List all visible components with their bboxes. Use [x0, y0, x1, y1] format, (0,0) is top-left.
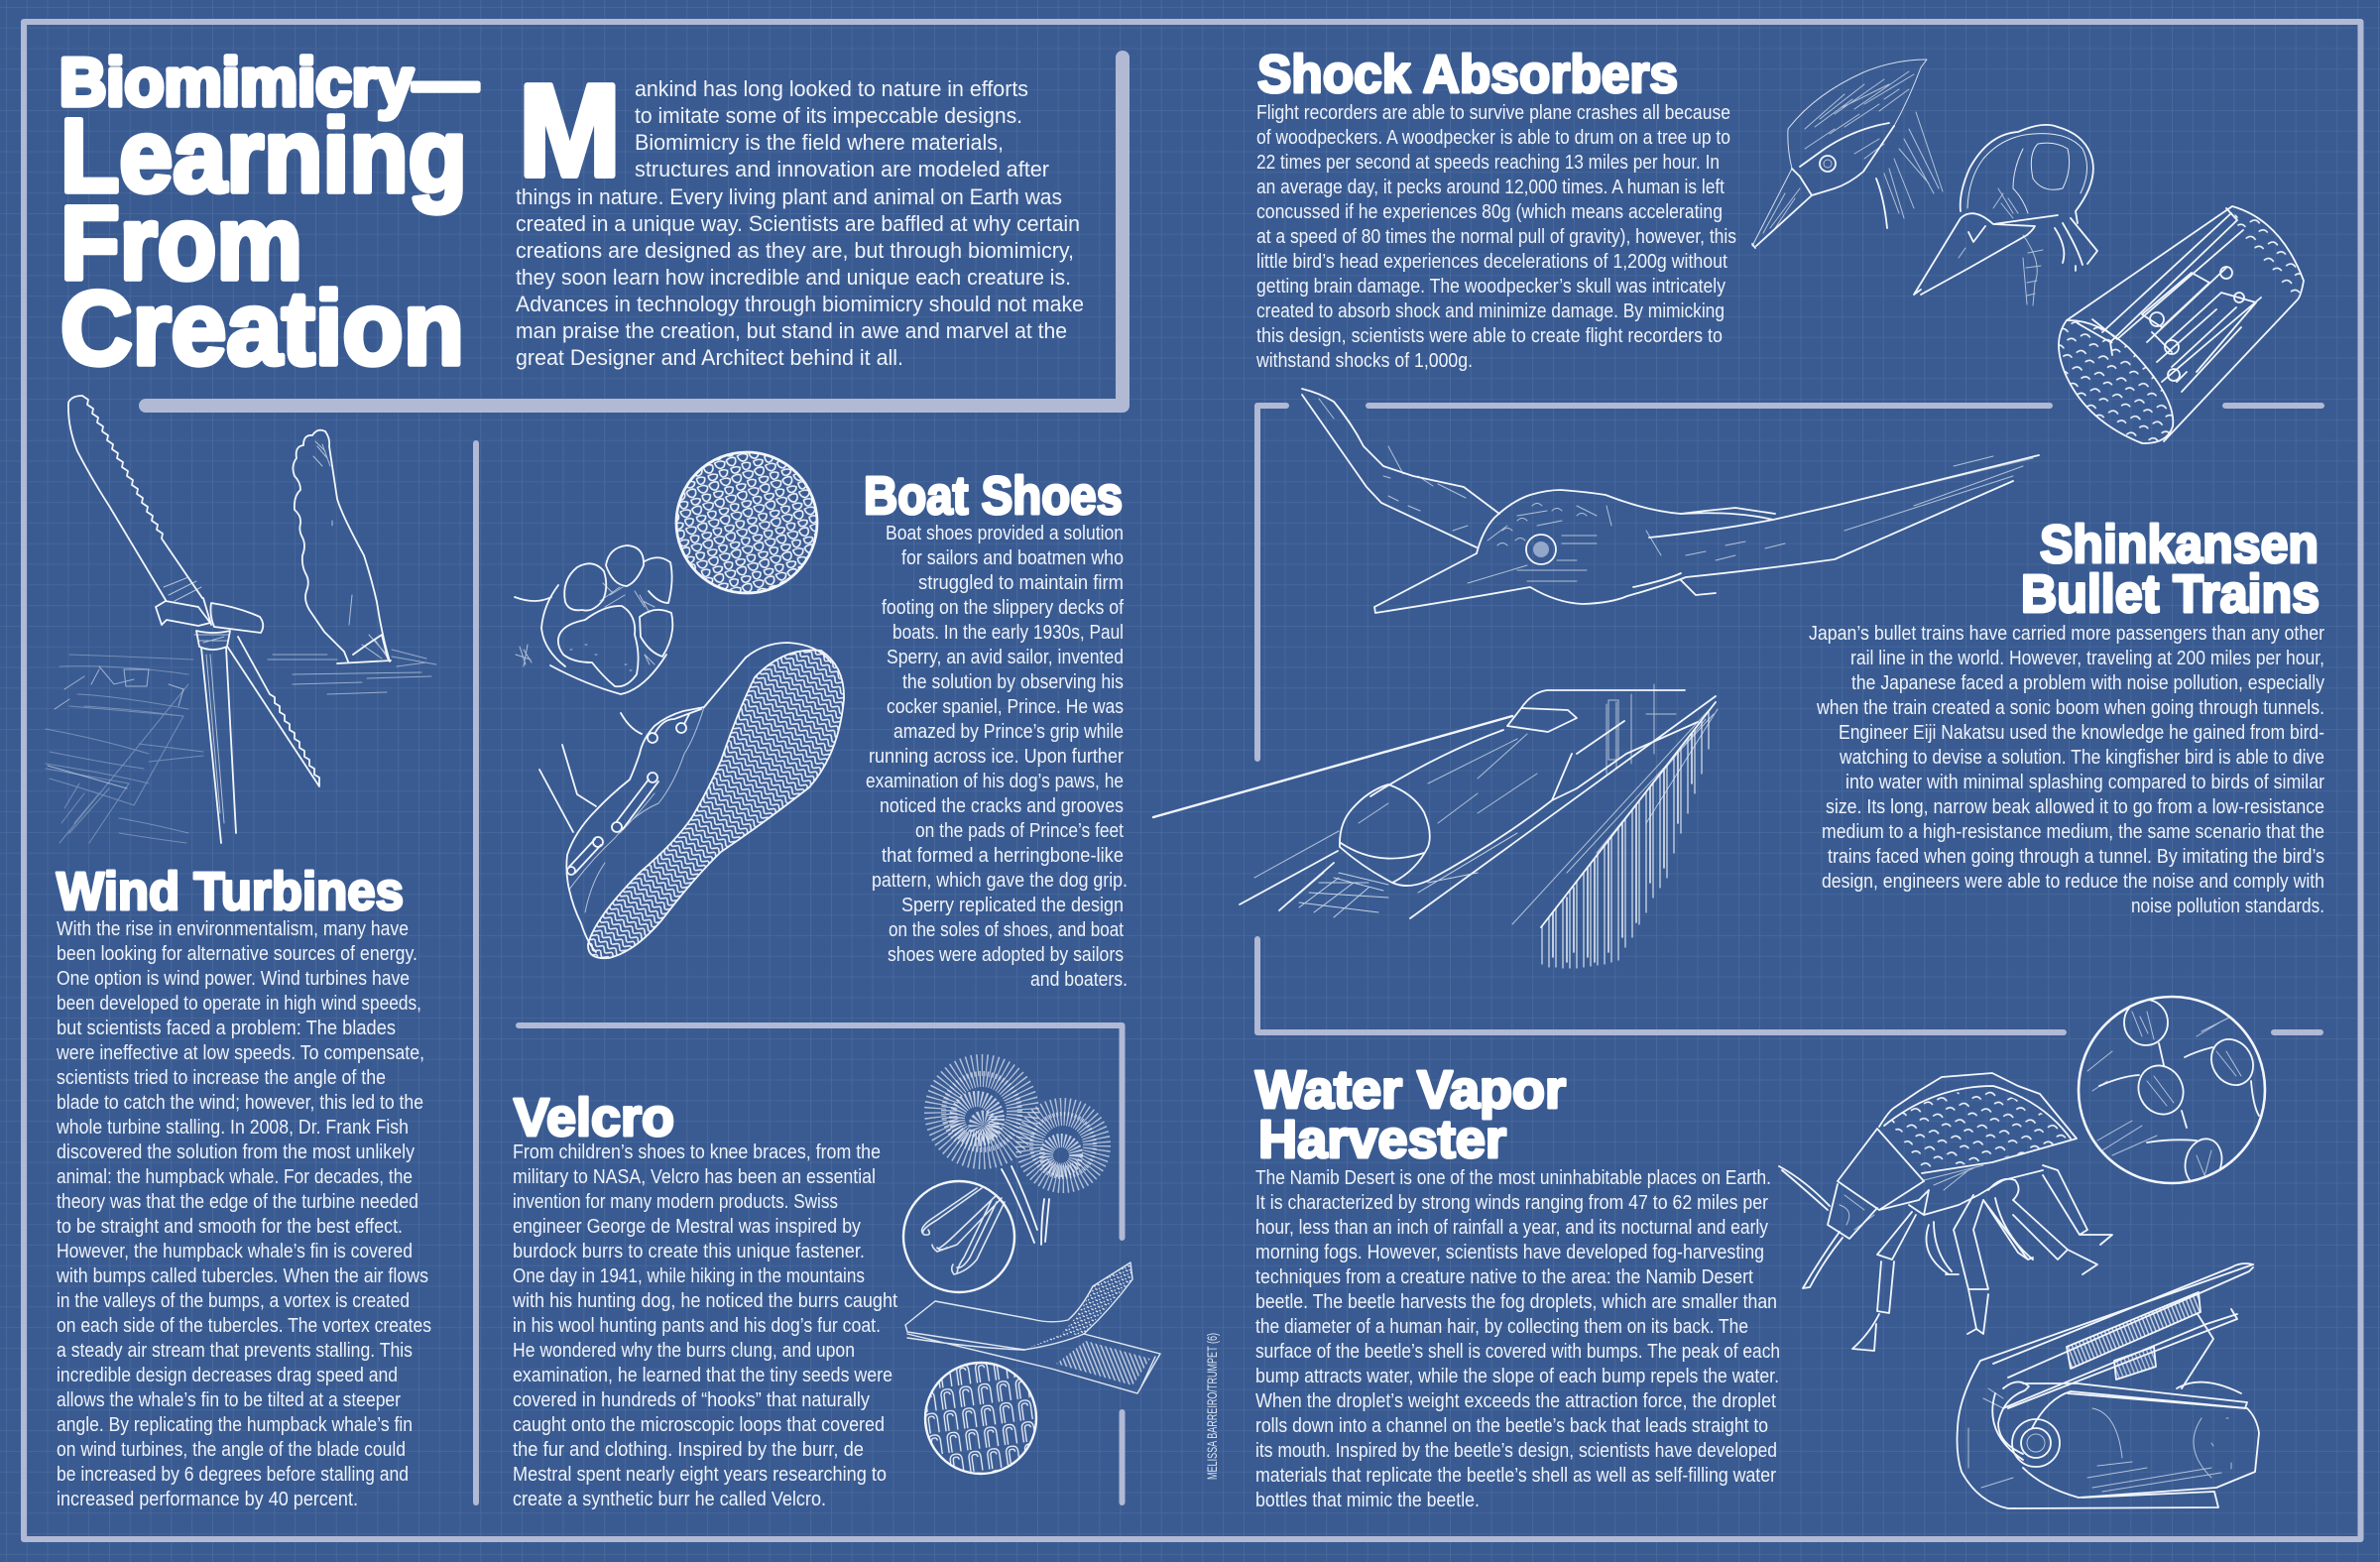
text block: water vapor harvester: It is characterized by strong winds ranging from 47 to 62 miles per: [1255, 1192, 1768, 1214]
intro text block: creations are designed as they are, but through biomimicry,: [516, 238, 1074, 263]
title: From: [60, 185, 302, 301]
photo credit: MELISSA BARREIRO/TRUMPET (6): [1205, 1333, 1220, 1480]
text block: shock absorbers: withstand shocks of 1,000g.: [1255, 350, 1473, 372]
text block: wind turbines: on each side of the tubercles. The vortex creates: [57, 1315, 431, 1337]
text block: wind turbines: been looking for alternative sources of energy.: [57, 943, 417, 965]
text block: velcro: examination, he learned that the tiny seeds were: [513, 1365, 892, 1386]
title: Learning: [60, 98, 467, 214]
text block: wind turbines: on wind turbines, the angle of the blade could: [57, 1439, 406, 1461]
text block: wind turbines: be increased by 6 degrees before stalling and: [57, 1464, 409, 1486]
heading: water vapor harvester: Harvester: [1258, 1110, 1506, 1169]
text block: velcro: create a synthetic burr he called Velcro.: [513, 1489, 826, 1510]
text block: boat shoes: boats. In the early 1930s, Paul: [892, 622, 1124, 644]
intro text block: created in a unique way. Scientists are baffled at why certain: [516, 211, 1080, 236]
title: Biomimicry—: [60, 45, 478, 120]
text block: wind turbines: theory was that the edge of the turbine needed: [57, 1191, 418, 1213]
heading: shinkansen bullet trains: [2021, 515, 2320, 624]
heading: velcro: Velcro: [514, 1088, 674, 1147]
title: [60, 45, 478, 387]
heading: wind turbines: Wind Turbines: [57, 862, 404, 921]
text block: water vapor harvester: When the droplet’s weight exceeds the attraction force, the droplet: [1255, 1390, 1776, 1412]
text block: shock absorbers: getting brain damage. The woodpecker’s skull was intricately: [1256, 276, 1726, 298]
text block: velcro: the fur and clothing. Inspired by the burr, de: [513, 1439, 864, 1461]
text block: shock absorbers: at a speed of 80 times the normal pull of gravity), however, this: [1256, 226, 1736, 248]
icon: beetle bump magnified circle: [2079, 997, 2265, 1190]
text block: velcro: caught onto the microscopic loops that covered: [513, 1414, 885, 1436]
text block: wind turbines: blade to catch the wind; however, this led to the: [57, 1092, 423, 1114]
text block: shinkansen: Engineer Eiji Nakatsu used the knowledge he gained from bird-: [1839, 722, 2324, 744]
text block: wind turbines: increased performance by 40 percent.: [57, 1489, 358, 1510]
heading: shinkansen bullet trains: Shinkansen: [2040, 515, 2319, 574]
icon: shinkansen bullet train: [1153, 684, 1718, 968]
velcro bracket rule: [519, 1025, 1123, 1502]
text block: water vapor harvester: [1255, 1167, 1780, 1511]
intro text block: they soon learn how incredible and unique each creature is.: [516, 265, 1071, 290]
text block: boat shoes: running across ice. Upon further: [869, 746, 1124, 768]
text block: velcro: burdock burrs to create this unique fastener.: [513, 1241, 865, 1262]
icon: paw pad texture circle: [676, 452, 817, 593]
text block: wind turbines: were ineffective at low speeds. To compensate,: [56, 1042, 424, 1064]
icon: self-filling water bottle: [1958, 1263, 2259, 1508]
icon: namib beetle: [1779, 1073, 2112, 1351]
intro text block: to imitate some of its impeccable designs.: [635, 103, 1022, 128]
text block: shinkansen: medium to a high-resistance medium, the same scenario that the: [1822, 821, 2324, 843]
text block: wind turbines: animal: the humpback whale. For decades, the: [57, 1166, 413, 1188]
text block: shinkansen: into water with minimal splashing compared to birds of similar: [1845, 772, 2324, 793]
text block: wind turbines: discovered the solution from the most unlikely: [57, 1141, 415, 1163]
icon: burr hooks circle: [903, 1181, 1014, 1292]
intro text block: [516, 58, 1084, 370]
text block: wind turbines: been developed to operate in high wind speeds,: [57, 993, 421, 1015]
text block: water vapor harvester: hour, less than an inch of rainfall a year, and its nocturnal and early: [1255, 1217, 1768, 1239]
icon: velcro loops circle: [925, 1363, 1036, 1474]
text block: velcro: He wondered why the burrs clung, and upon: [513, 1340, 855, 1362]
text block: shinkansen: noise pollution standards.: [2131, 896, 2324, 917]
intro text block: Biomimicry is the field where materials,: [635, 130, 1004, 155]
text block: wind turbines: scientists tried to increase the angle of the: [57, 1067, 386, 1089]
text block: boat shoes: amazed by Prince’s grip while: [893, 721, 1124, 743]
text block: wind turbines: a steady air stream that prevents stalling. This: [57, 1340, 413, 1362]
text block: wind turbines: One option is wind power. Wind turbines have: [57, 968, 410, 990]
text block: water vapor harvester: surface of the beetle’s shell is covered with bumps. The peak of each: [1255, 1341, 1780, 1363]
text block: boat shoes: on the soles of shoes, and boat: [889, 919, 1124, 941]
icon: woodpecker head: [1752, 60, 1943, 248]
text block: water vapor harvester: The Namib Desert is one of the most uninhabitable places on Earth.: [1255, 1167, 1771, 1189]
text block: shock absorbers: an average day, it pecks around 12,000 times. A human is left: [1256, 177, 1725, 198]
text block: water vapor harvester: techniques from a creature native to the area: the Namib Desert: [1255, 1266, 1753, 1288]
text block: shock absorbers: Flight recorders are able to survive plane crashes all because: [1256, 102, 1730, 124]
text block: velcro: From children’s shoes to knee braces, from the: [513, 1141, 881, 1163]
text block: boat shoes: shoes were adopted by sailors: [888, 944, 1124, 966]
text block: wind turbines: However, the humpback whale’s fin is covered: [57, 1241, 413, 1262]
text block: velcro: [512, 1141, 897, 1510]
text block: shinkansen: trains faced when going through a tunnel. By imitating the bird’s: [1828, 846, 2324, 868]
text block: boat shoes: examination of his dog’s paws, he: [866, 771, 1124, 792]
text block: shock absorbers: [1255, 102, 1736, 372]
text block: boat shoes: and boaters.: [1030, 969, 1128, 991]
text block: shock absorbers: of woodpeckers. A woodpecker is able to drum on a tree up to: [1256, 127, 1730, 149]
text block: boat shoes: footing on the slippery decks of: [882, 597, 1124, 619]
text block: velcro: in his wool hunting pants and his dog’s fur coat.: [513, 1315, 881, 1337]
icon: burdock burrs: [935, 1065, 1102, 1245]
text block: boat shoes: the solution by observing his: [902, 671, 1124, 693]
intro text block: Advances in technology through biomimicry should not make: [516, 292, 1084, 316]
right panel bracket rule: [1257, 406, 2321, 1032]
text block: shinkansen: when the train created a sonic boom when going through tunnels.: [1816, 697, 2324, 719]
title: Creation: [60, 271, 464, 387]
text block: wind turbines: incredible design decreases drag speed and: [57, 1365, 398, 1386]
text block: wind turbines: in the valleys of the bumps, a vortex is created: [57, 1290, 410, 1312]
text block: boat shoes: struggled to maintain firm: [918, 572, 1124, 594]
heading: water vapor harvester: Water Vapor: [1255, 1060, 1566, 1120]
text block: water vapor harvester: the diameter of a human hair, by collecting them on its back. The: [1255, 1316, 1748, 1338]
intro text block: man praise the creation, but stand in awe and marvel at the: [516, 318, 1067, 343]
heading: shock absorbers: Shock Absorbers: [1257, 45, 1678, 104]
text block: boat shoes: Sperry, an avid sailor, invented: [887, 647, 1124, 668]
viaduct piers: [1512, 702, 1718, 968]
icon: dog paw: [515, 545, 672, 694]
text block: shock absorbers: this design, scientists were able to create flight recorders to: [1256, 325, 1723, 347]
text block: water vapor harvester: rolls down into a channel on the beetle’s back that leads straight to: [1255, 1415, 1768, 1437]
heading: shinkansen bullet trains: Bullet Trains: [2021, 564, 2320, 624]
text block: wind turbines: [56, 918, 431, 1510]
text block: shinkansen: rail line in the world. However, traveling at 200 miles per hour,: [1850, 648, 2324, 669]
text block: boat shoes: noticed the cracks and grooves: [880, 795, 1124, 817]
text block: water vapor harvester: bump attracts water, while the slope of each bump repels the water.: [1255, 1366, 1779, 1387]
text block: shinkansen: [1809, 623, 2324, 917]
intro text block: things in nature. Every living plant and animal on Earth was: [516, 184, 1062, 209]
text block: water vapor harvester: morning fogs. However, scientists have developed fog-harvesting: [1255, 1242, 1764, 1263]
icon: kingfisher bird: [1302, 389, 2039, 613]
text block: shinkansen: watching to devise a solution. The kingfisher bird is able to dive: [1839, 747, 2324, 769]
text block: water vapor harvester: materials that replicate the beetle’s shell as well as self-filling water: [1255, 1465, 1776, 1487]
icon: woodpecker skull: [1914, 125, 2097, 305]
text block: shinkansen: design, engineers were able to reduce the noise and comply with: [1822, 871, 2324, 893]
text block: velcro: One day in 1941, while hiking in the mountains: [513, 1265, 865, 1287]
text block: wind turbines: angle. By replicating the humpback whale’s fin: [57, 1414, 413, 1436]
text block: boat shoes: on the pads of Prince’s feet: [915, 820, 1124, 842]
text block: shock absorbers: little bird’s head experiences decelerations of 1,200g without: [1256, 251, 1727, 273]
text block: wind turbines: With the rise in environmentalism, many have: [57, 918, 409, 940]
text block: shinkansen: the Japanese faced a problem with noise pollution, especially: [1851, 672, 2324, 694]
text block: boat shoes: that formed a herringbone-like: [882, 845, 1124, 867]
text block: boat shoes: Boat shoes provided a solution: [886, 523, 1124, 544]
text block: boat shoes: Sperry replicated the design: [901, 895, 1124, 916]
text block: shinkansen: size. Its long, narrow beak allowed it to go from a low-resistance: [1826, 796, 2324, 818]
text block: velcro: with his hunting dog, he noticed the burrs caught: [512, 1290, 897, 1312]
text block: velcro: engineer George de Mestral was inspired by: [513, 1216, 861, 1238]
text block: boat shoes: pattern, which gave the dog grip.: [872, 870, 1128, 892]
text block: shock absorbers: 22 times per second at speeds reaching 13 miles per hour. In: [1256, 152, 1720, 174]
text block: shock absorbers: created to absorb shock and minimize damage. By mimicking: [1256, 300, 1725, 322]
intro text block: great Designer and Architect behind it all.: [516, 345, 903, 370]
text block: wind turbines: whole turbine stalling. In 2008, Dr. Frank Fish: [56, 1117, 409, 1139]
text block: wind turbines: allows the whale’s fin to be tilted at a steeper: [57, 1389, 401, 1411]
text block: wind turbines: with bumps called tubercles. When the air flows: [56, 1265, 428, 1287]
text block: velcro: military to NASA, Velcro has been an essential: [513, 1166, 876, 1188]
icon: flight recorder cylinder: [2059, 206, 2304, 443]
icon: wind turbine with serrated blades: [46, 396, 319, 843]
text block: water vapor harvester: its mouth. Inspired by the beetle’s design, scientists have developed: [1255, 1440, 1777, 1462]
heading: boat shoes: Boat Shoes: [864, 466, 1123, 526]
heading: water vapor harvester: [1255, 1060, 1566, 1169]
text block: velcro: invention for many modern products. Swiss: [513, 1191, 838, 1213]
text block: boat shoes: cocker spaniel, Prince. He was: [887, 696, 1124, 718]
text block: velcro: covered in hundreds of “hooks” that naturally: [513, 1389, 870, 1411]
text block: boat shoes: for sailors and boatmen who: [901, 547, 1124, 569]
text block: water vapor harvester: bottles that mimic the beetle.: [1255, 1490, 1480, 1511]
header bracket rule: [146, 58, 1123, 406]
text block: shock absorbers: concussed if he experiences 80g (which means accelerating: [1256, 201, 1723, 223]
drop cap: M: [519, 58, 621, 203]
landscape sketch behind turbine: [46, 655, 203, 843]
intro text block: structures and innovation are modeled after: [635, 157, 1049, 181]
text block: velcro: Mestral spent nearly eight years researching to: [513, 1464, 887, 1486]
icon: velcro strips peeling: [905, 1262, 1160, 1393]
intro text block: ankind has long looked to nature in efforts: [635, 76, 1028, 101]
text block: wind turbines: to be straight and smooth for the best effect.: [57, 1216, 403, 1238]
icon: humpback whale fin: [268, 430, 436, 694]
text block: wind turbines: but scientists faced a problem: The blades: [57, 1018, 396, 1039]
icon: boat shoe with herringbone sole: [539, 643, 844, 958]
text block: shinkansen: Japan’s bullet trains have carried more passengers than any other: [1809, 623, 2324, 645]
text block: water vapor harvester: beetle. The beetle harvests the fog droplets, which are smaller than: [1255, 1291, 1777, 1313]
text block: boat shoes: [866, 523, 1128, 991]
left column divider: [473, 443, 479, 1502]
